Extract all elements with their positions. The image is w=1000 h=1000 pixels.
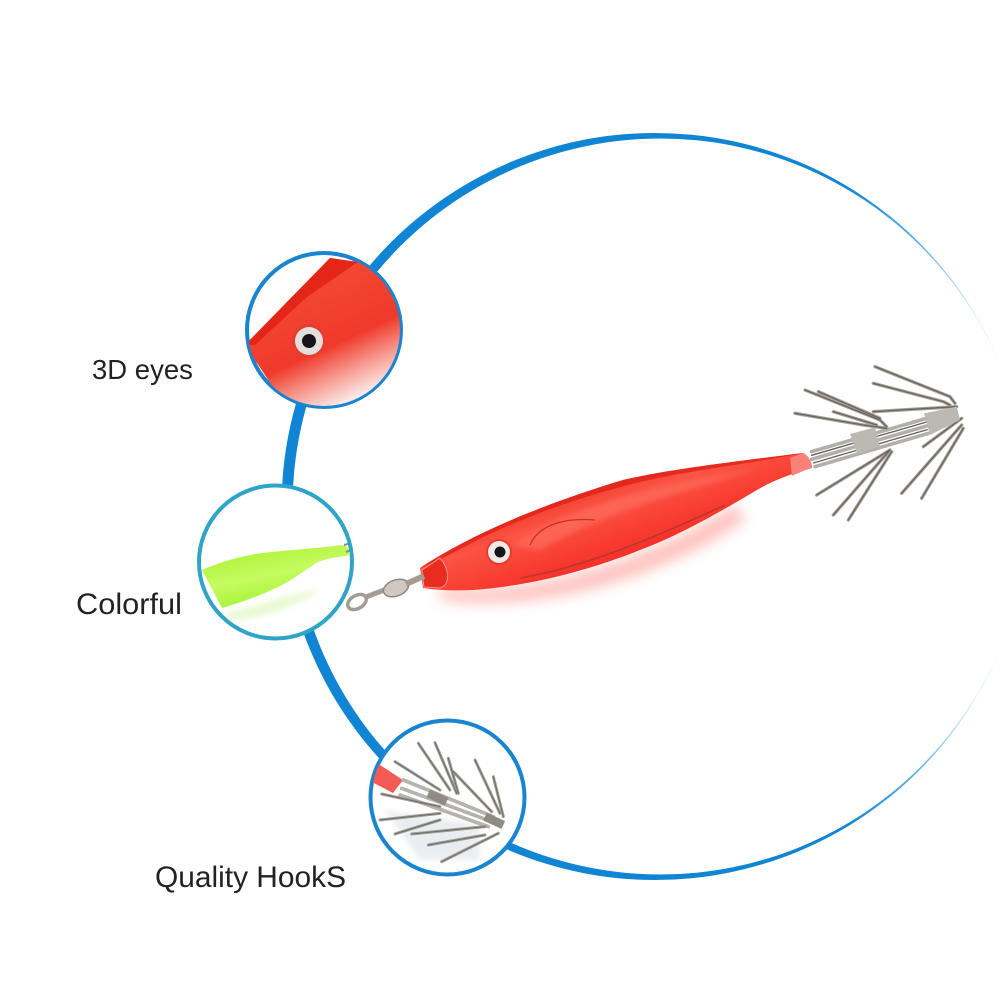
inset: quality hooks [370, 720, 524, 874]
lure shadow [440, 505, 745, 603]
large blue ring [282, 133, 1000, 880]
inset eye [292, 324, 326, 358]
lure body [420, 453, 812, 590]
green lure [202, 545, 350, 608]
lure hooks [795, 367, 963, 520]
shadow [385, 810, 480, 860]
swivel [345, 576, 424, 613]
inset dark stripe [245, 258, 358, 345]
hook tip [344, 543, 352, 552]
belly line [520, 505, 725, 578]
green glow [225, 590, 320, 620]
hook wires [380, 743, 503, 862]
lure eye [486, 539, 512, 565]
body highlight [510, 468, 760, 550]
tail tip [790, 453, 812, 476]
inset: 3D eyes [245, 251, 403, 409]
label: Colorful: Colorful [76, 588, 182, 621]
red squid jig lure [345, 367, 963, 613]
inset body [248, 258, 400, 406]
inset: colorful [199, 486, 352, 638]
label: 3D eyes: 3D eyes [92, 354, 193, 385]
pink tip [372, 765, 403, 793]
label: Quality HookS: Quality HookS [155, 861, 346, 894]
nose detail [422, 558, 448, 588]
gill line [530, 520, 595, 545]
back ridge [420, 453, 803, 568]
